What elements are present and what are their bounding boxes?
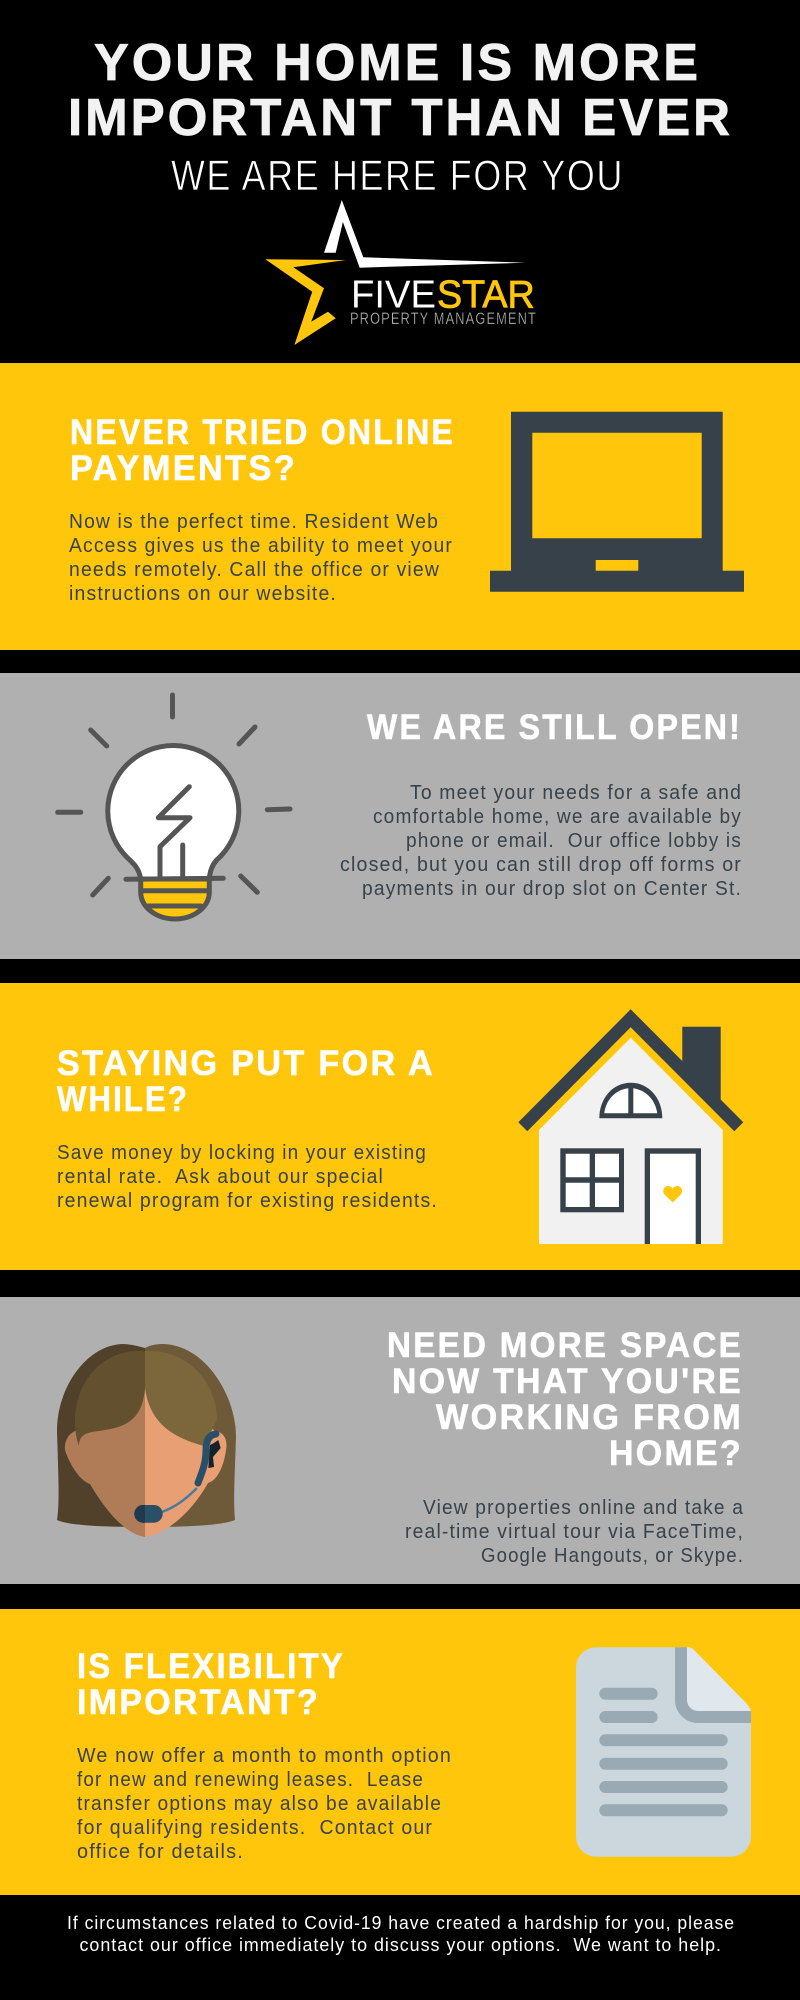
heading: need more space: NEED MORE SPACE xyxy=(387,1326,743,1365)
heading: need more space: HOME? xyxy=(609,1434,743,1473)
icon: house xyxy=(518,1009,743,1244)
text: flexibility body: for qualifying residents. Contact our xyxy=(77,1817,433,1839)
text: still open body: comfortable home, we are available by xyxy=(373,806,742,828)
text: still open body: payments in our drop slot on Center St. xyxy=(362,878,742,900)
footer note: If circumstances related to Covid-19 have created a hardship for you, please xyxy=(67,1913,735,1933)
text: need more space body: real-time virtual tour via FaceTime, xyxy=(405,1521,744,1543)
footer note xyxy=(67,1913,735,1955)
icon: light bulb xyxy=(58,695,290,919)
heading: never tried online payments xyxy=(70,413,455,488)
text: need more space body: Google Hangouts, or Skype. xyxy=(481,1545,744,1567)
panel: staying put xyxy=(0,983,800,1270)
text: staying put body xyxy=(57,1142,438,1212)
footer note: contact our office immediately to discuss your options. We want to help. xyxy=(80,1935,722,1955)
text: online payments body xyxy=(69,511,453,605)
text: staying put body: Save money by locking in your existing xyxy=(57,1142,427,1164)
icon: document xyxy=(576,1647,751,1857)
text: flexibility body xyxy=(77,1745,452,1863)
logo: Five Star Property Management: STAR xyxy=(437,273,535,316)
logo: Five Star Property Management xyxy=(265,200,537,345)
text: flexibility body: for new and renewing leases. Lease xyxy=(77,1769,424,1791)
panel: online payments xyxy=(0,363,800,650)
heading: is flexibility important: IMPORTANT? xyxy=(77,1683,320,1722)
text: online payments body: needs remotely. Call the office or view xyxy=(69,559,440,581)
panel: need more space xyxy=(0,1297,800,1584)
text: still open body: To meet your needs for a safe and xyxy=(410,782,742,804)
heading: is flexibility important xyxy=(77,1647,345,1722)
title xyxy=(68,34,733,147)
title: YOUR HOME IS MORE xyxy=(94,34,701,92)
text: still open body: closed, but you can still drop off forms or xyxy=(340,854,742,876)
heading: staying put for a while xyxy=(57,1044,435,1119)
heading: need more space: WORKING FROM xyxy=(436,1398,743,1437)
icon: woman with headset xyxy=(57,1344,236,1537)
text: still open body xyxy=(340,782,742,900)
text: staying put body: renewal program for existing residents. xyxy=(57,1190,438,1212)
heading: staying put for a while: WHILE? xyxy=(57,1080,189,1119)
logo: Five Star Property Management: FIVE xyxy=(351,273,436,316)
text: need more space body xyxy=(405,1497,744,1567)
icon: laptop xyxy=(490,412,744,592)
heading: never tried online payments: NEVER TRIED ONLINE xyxy=(70,413,455,452)
text: need more space body: View properties online and take a xyxy=(423,1497,744,1519)
heading: need more space xyxy=(387,1326,743,1473)
heading: we are still open: WE ARE STILL OPEN! xyxy=(367,708,742,747)
logo: Five Star Property Management: PROPERTY MANAGEMENT xyxy=(350,309,537,328)
title: IMPORTANT THAN EVER xyxy=(68,89,733,147)
text: flexibility body: office for details. xyxy=(77,1841,244,1863)
text: still open body: phone or email. Our office lobby is xyxy=(406,830,742,852)
heading: need more space: NOW THAT YOU'RE xyxy=(392,1362,743,1401)
subtitle: WE ARE HERE FOR YOU xyxy=(171,152,624,200)
text: online payments body: Access gives us the ability to meet your xyxy=(69,535,453,557)
text: staying put body: rental rate. Ask about our special xyxy=(57,1166,384,1188)
panel: still open xyxy=(0,673,800,959)
text: online payments body: instructions on our website. xyxy=(69,583,337,605)
header panel xyxy=(68,34,733,345)
text: flexibility body: transfer options may also be available xyxy=(77,1793,442,1815)
panel: flexibility xyxy=(0,1609,800,1895)
heading: never tried online payments: PAYMENTS? xyxy=(70,449,297,488)
heading: staying put for a while: STAYING PUT FOR A xyxy=(57,1044,435,1083)
text: online payments body: Now is the perfect time. Resident Web xyxy=(69,511,439,533)
text: flexibility body: We now offer a month to month option xyxy=(77,1745,452,1767)
heading: is flexibility important: IS FLEXIBILITY xyxy=(77,1647,345,1686)
